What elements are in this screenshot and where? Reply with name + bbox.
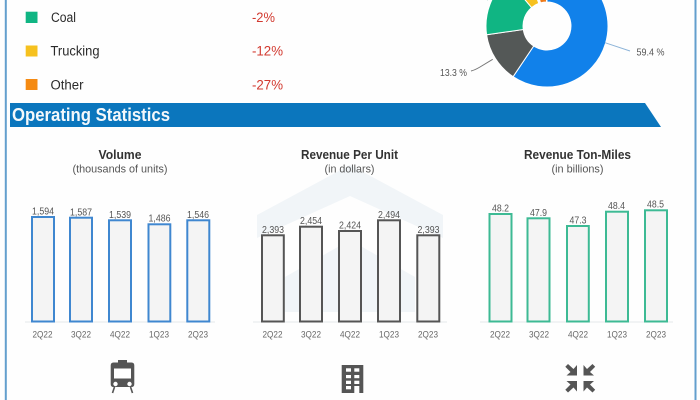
bar chart: revenue ton-miles: 47.9 (530, 208, 547, 219)
icon: train (111, 360, 134, 393)
left border (5, 0, 7, 400)
legend row: other: -27% (252, 78, 283, 92)
legend row: trucking: Trucking (50, 44, 100, 58)
slice: orange (530, 0, 546, 3)
bar chart: volume: 1,486 (148, 214, 171, 224)
bar chart: revenue per unit: 2,424 (339, 220, 361, 232)
subheading: revenue ton-miles: (in billions) (552, 164, 604, 176)
bar chart: volume: 3Q22 (71, 330, 91, 340)
bar chart: revenue per unit: 2,494 (378, 210, 400, 221)
bar chart: revenue per unit: 3Q22 (301, 330, 321, 340)
bar chart: volume: 1Q23 (149, 330, 169, 340)
donut chart (440, 0, 664, 87)
slice: blue 59.4% (513, 0, 608, 87)
slice: green (486, 0, 532, 35)
bar chart: revenue per unit: 2Q23 (418, 330, 438, 340)
bar chart: revenue ton-miles: 48.5 (647, 200, 664, 210)
bar chart: volume: 1,587 (70, 208, 92, 218)
icon: building (342, 365, 363, 393)
heading: revenue per unit: Revenue Per Unit (301, 148, 399, 162)
bar chart: revenue per unit: 1Q23 (379, 330, 399, 340)
panel: revenue ton-miles (480, 148, 673, 392)
right border (694, 0, 696, 400)
bar chart: revenue ton-miles: 4Q22 (568, 330, 588, 340)
legend row: coal: Coal (51, 10, 76, 25)
panel: volume (25, 148, 215, 393)
heading: Operating Statistics (12, 105, 170, 125)
bar chart: revenue per unit: 2Q22 (262, 330, 282, 340)
bar chart: revenue ton-miles: 2Q23 (646, 330, 666, 340)
slice: yellow (508, 0, 539, 8)
legend row: other: Other (50, 78, 84, 92)
heading: volume: Volume (98, 148, 142, 162)
bar chart: revenue per unit: 2,454 (300, 216, 322, 227)
legend: revenue change rows (26, 10, 283, 92)
bar chart: revenue per unit: 4Q22 (340, 330, 360, 340)
legend row: trucking (26, 44, 283, 58)
watermark chevrons (257, 165, 443, 312)
legend row: trucking: -12% (252, 44, 283, 58)
heading: revenue ton-miles: Revenue Ton-Miles (524, 148, 631, 162)
bar chart: volume: 1,539 (109, 210, 131, 221)
bar chart: revenue ton-miles (480, 200, 673, 340)
subheading: volume: (thousands of units) (72, 164, 168, 176)
bar chart: revenue ton-miles: 2Q22 (490, 330, 510, 340)
label: 59.4 %: 59.4 % (636, 46, 664, 58)
panel: revenue per unit (253, 148, 447, 393)
icon: compress arrows (565, 364, 595, 392)
section banner (10, 103, 661, 127)
bar chart: revenue ton-miles: 47.3 (570, 216, 587, 226)
bar chart: revenue per unit (253, 210, 447, 340)
bar chart: volume: 2Q22 (32, 330, 52, 340)
label: 13.3 % (440, 59, 493, 79)
bar chart: volume (25, 206, 215, 340)
bar chart: volume: 2Q23 (188, 330, 208, 340)
slice: grey 13.3% (487, 30, 534, 77)
subheading: revenue per unit: (in dollars) (324, 164, 374, 176)
legend row: other (26, 78, 283, 92)
bar chart: revenue ton-miles: 48.2 (492, 204, 509, 214)
bar chart: revenue ton-miles: 48.4 (608, 201, 625, 212)
label: 13.3 %: 13.3 % (440, 67, 467, 79)
bar chart: volume: 1,594 (32, 206, 54, 218)
bar chart: revenue ton-miles: 1Q23 (607, 330, 627, 340)
bar chart: revenue ton-miles: 3Q22 (529, 330, 549, 340)
legend row: coal: -2% (252, 10, 275, 25)
bar chart: volume: 4Q22 (110, 330, 130, 340)
bar chart: revenue per unit: 2,393 (418, 225, 440, 236)
bar chart: revenue per unit: 2,393 (262, 225, 284, 236)
bar chart: volume: 1,546 (187, 210, 209, 221)
label: 59.4 % (605, 43, 664, 58)
legend row: coal (26, 10, 275, 25)
